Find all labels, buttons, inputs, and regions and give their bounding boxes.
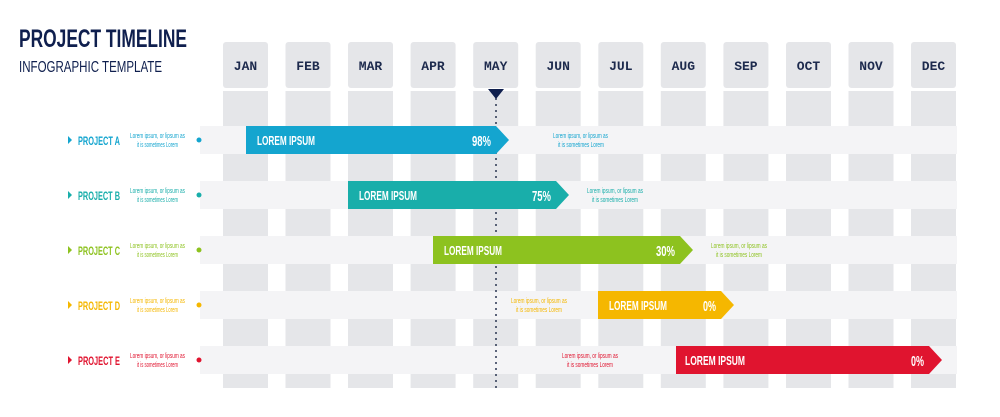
project labels: it is sometimes Lorem — [137, 362, 178, 369]
today marker dashed line — [488, 89, 504, 388]
project labels: Lorem ipsum, or lipsum as — [130, 298, 185, 305]
bar C: Lorem ipsum, or lipsum as — [711, 243, 767, 250]
bar D: LOREM IPSUM — [609, 298, 667, 313]
month labels: AUG — [672, 59, 695, 74]
month labels: FEB — [296, 59, 320, 74]
project labels: Lorem ipsum, or lipsum as — [130, 243, 185, 250]
bar B: it is sometimes Lorem — [592, 197, 638, 204]
month labels: DEC — [922, 59, 945, 74]
bar A: it is sometimes Lorem — [558, 142, 604, 149]
project labels: PROJECT D — [78, 299, 120, 313]
month labels: MAR — [359, 59, 382, 74]
bar B: LOREM IPSUM — [359, 188, 417, 203]
project labels: Lorem ipsum, or lipsum as — [130, 188, 185, 195]
bar C — [433, 236, 767, 264]
month labels — [234, 59, 945, 74]
project labels — [68, 133, 202, 369]
bar E — [562, 346, 942, 374]
month labels: APR — [421, 59, 445, 74]
bar A: LOREM IPSUM — [257, 133, 315, 148]
bar A: Lorem ipsum, or lipsum as — [553, 133, 608, 140]
grid: month columns — [200, 42, 957, 388]
project labels: Lorem ipsum, or lipsum as — [130, 353, 185, 360]
bar D: Lorem ipsum, or lipsum as — [511, 298, 567, 305]
month labels: NOV — [859, 59, 883, 74]
project labels: Lorem ipsum, or lipsum as — [130, 133, 185, 140]
bar C: LOREM IPSUM — [444, 243, 502, 258]
project labels: PROJECT C — [78, 244, 120, 258]
month labels: OCT — [797, 59, 820, 74]
month labels: JUL — [609, 59, 633, 74]
month labels: MAY — [484, 59, 508, 74]
title — [19, 25, 187, 76]
project labels: it is sometimes Lorem — [137, 142, 178, 149]
bar D — [511, 291, 734, 319]
bar E: it is sometimes Lorem — [567, 362, 613, 369]
month labels: JAN — [234, 59, 257, 74]
bar B: Lorem ipsum, or lipsum as — [587, 188, 643, 195]
project labels: it is sometimes Lorem — [137, 197, 178, 204]
bar C: it is sometimes Lorem — [716, 252, 762, 259]
title: PROJECT TIMELINE — [19, 25, 187, 53]
bar B — [348, 181, 643, 209]
bar D: 0% — [703, 298, 716, 315]
bar C: 30% — [656, 243, 675, 260]
bar E: 0% — [911, 353, 924, 370]
bar D: it is sometimes Lorem — [516, 307, 562, 314]
project labels: PROJECT A — [78, 134, 120, 148]
bar A: 98% — [472, 133, 491, 150]
bar E: Lorem ipsum, or lipsum as — [562, 353, 618, 360]
project labels: it is sometimes Lorem — [137, 307, 178, 314]
bar A — [246, 126, 608, 154]
bar E: LOREM IPSUM — [685, 353, 745, 368]
project labels: it is sometimes Lorem — [137, 252, 178, 259]
project labels: PROJECT E — [78, 354, 120, 368]
bar B: 75% — [532, 188, 551, 205]
project labels: PROJECT B — [78, 189, 120, 203]
month labels: SEP — [734, 59, 758, 74]
title: INFOGRAPHIC TEMPLATE — [19, 59, 162, 76]
month labels: JUN — [546, 59, 570, 74]
